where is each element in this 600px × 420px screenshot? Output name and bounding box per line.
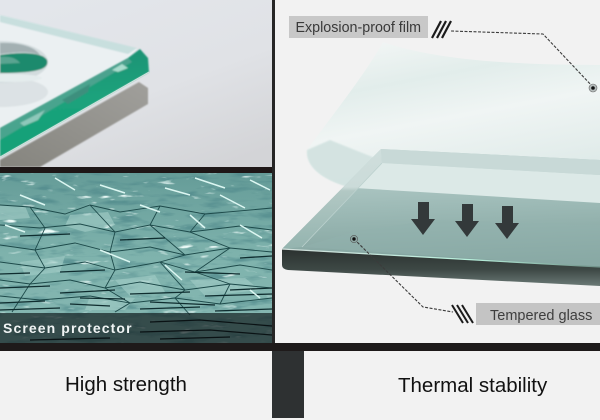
pale glass cells bbox=[0, 205, 260, 310]
water droplet bbox=[0, 41, 48, 107]
panel: shattered glass photo bbox=[0, 173, 272, 343]
label: Explosion-proof film bbox=[289, 16, 428, 38]
tempered glass top surface bbox=[282, 149, 600, 267]
leader line: glass bbox=[350, 235, 453, 312]
caption: Thermal stability: Thermal stability bbox=[398, 374, 548, 397]
glass top surface bbox=[0, 15, 137, 128]
arrow 3 bbox=[495, 206, 519, 239]
divider: vertical dark bar bbox=[272, 0, 275, 345]
arrow 1 bbox=[411, 202, 435, 235]
icon: film slashes bbox=[432, 21, 451, 38]
arrow 2 bbox=[455, 204, 479, 237]
divider: horizontal bottom bar bbox=[0, 343, 600, 351]
explosion-proof film sheet bbox=[330, 54, 600, 160]
glass reflection shadow bbox=[0, 82, 148, 167]
label: Tempered glass bbox=[476, 303, 600, 325]
caption: High strength: High strength bbox=[65, 373, 187, 396]
caption: Screen protector: Screen protector bbox=[3, 320, 133, 336]
label: Explosion-proof film: Explosion-proof film bbox=[296, 20, 421, 36]
panel: glass corner photo bbox=[0, 0, 272, 167]
panel: layered glass diagram bbox=[282, 54, 600, 286]
leader line: film bbox=[451, 31, 597, 92]
film curled lip bbox=[307, 140, 375, 188]
glass green edge bbox=[0, 49, 149, 157]
caption overlay band bbox=[0, 313, 272, 343]
icon: glass slashes bbox=[452, 305, 473, 323]
divider: dark column bbox=[272, 351, 304, 418]
glass left bevel bbox=[282, 149, 382, 249]
label: Tempered glass: Tempered glass bbox=[490, 308, 592, 324]
cracks bbox=[0, 205, 272, 315]
glass far bevel bbox=[381, 149, 600, 175]
lighter lower surface bbox=[525, 259, 600, 266]
divider: horizontal dark bar bbox=[0, 167, 272, 173]
glass front edge bbox=[282, 249, 600, 286]
